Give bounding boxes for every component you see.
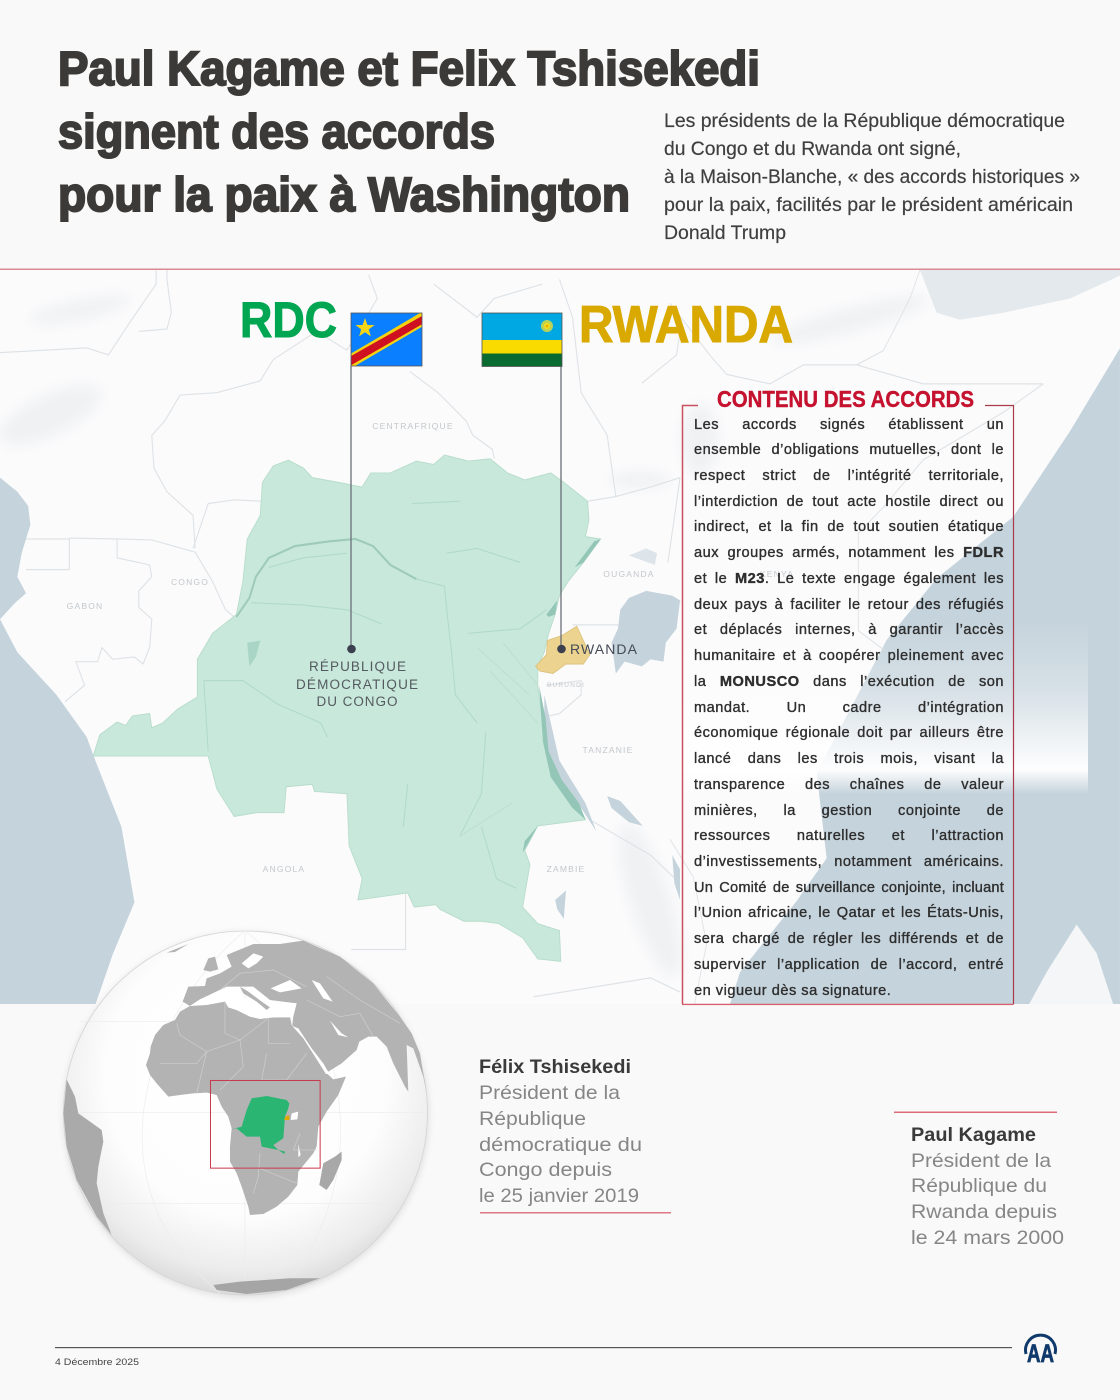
accords body text: et déplacés internes, à garantir l’accès xyxy=(694,622,1004,638)
locator rectangle xyxy=(210,1080,320,1168)
icon: AA logo: AA xyxy=(1027,1340,1054,1368)
accords body text: Les accords signés établissent un xyxy=(694,416,1004,432)
accords body text: d’investissements, notamment américains. xyxy=(694,854,1004,870)
great lakes and inland water xyxy=(544,548,680,919)
accords body text: ressources naturelles et l’attraction xyxy=(694,828,1004,844)
Kagame bio: République du xyxy=(911,1175,1047,1197)
intro text: à la Maison-Blanche, « des accords historiques » xyxy=(664,166,1080,188)
accords body text: sera chargé de régler les différends et de xyxy=(694,931,1004,947)
accords body text: l’interdiction de tout acte hostile direct ou xyxy=(694,494,1004,510)
Eurasia xyxy=(183,941,427,1093)
accords body text: indirect, et la fin de tout soutien étatique xyxy=(694,519,1004,535)
accords body text: deux pays à faciliter le retour des réfugiés xyxy=(694,597,1004,613)
Great Britain xyxy=(203,957,218,972)
intro text: Les présidents de la République démocratique xyxy=(664,110,1065,132)
DRC flag and pole xyxy=(347,313,422,653)
accords body text: aux groupes armés, notamment les FDLR xyxy=(694,545,1004,561)
accords box heading: CONTENU DES ACCORDS xyxy=(717,386,974,412)
neighbouring country labels: OUGANDA xyxy=(603,569,655,579)
accords body text: économique régionale doit par ailleurs être xyxy=(694,725,1004,741)
Rwanda map label: RWANDA xyxy=(570,641,638,657)
Kagame bio: le 24 mars 2000 xyxy=(911,1227,1064,1249)
Tshisekedi bio: Félix Tshisekedi xyxy=(479,1057,631,1078)
Tshisekedi bio: le 25 janvier 2019 xyxy=(479,1185,639,1207)
neighbouring country labels xyxy=(67,421,794,874)
gradient artifact over ocean xyxy=(816,654,1088,790)
accords body text: lancé dans les trois mois, visant la xyxy=(694,751,1004,767)
accords body text: humanitaire et à coopérer pleinement avec xyxy=(694,648,1004,664)
header panel xyxy=(0,0,1120,269)
Mediterranean, Black Sea, Caspian xyxy=(190,953,348,1157)
Rwanda flag and pole xyxy=(482,313,566,653)
intro text xyxy=(664,110,1080,244)
intro text: pour la paix, facilités par le président américain xyxy=(664,194,1073,216)
intro text: Donald Trump xyxy=(664,222,786,244)
map panel xyxy=(0,270,1120,1015)
Italy xyxy=(240,987,270,1010)
locator globe xyxy=(63,931,428,1297)
accords body text: superviser l’application de l’accord, entré xyxy=(694,957,1004,973)
neighbouring country labels: TANZANIE xyxy=(582,745,634,755)
lakes and rivers in DRC xyxy=(247,539,601,853)
Rwanda heading: RWANDA xyxy=(579,296,793,354)
accords body text: et le M23. Le texte engage également les xyxy=(694,571,1004,587)
accords body text: ensemble d’obligations mutuelles, dont le xyxy=(694,442,1004,458)
title: signent des accords xyxy=(58,106,495,159)
neighbouring country labels: CONGO xyxy=(171,577,209,587)
DRC territory xyxy=(93,455,601,961)
Antarctica xyxy=(213,1278,320,1294)
bottom band right xyxy=(680,1005,1120,1400)
accords body text: la MONUSCO dans l’exécution de son xyxy=(694,674,1004,690)
Rwanda on globe xyxy=(284,1115,289,1120)
Kagame bio: Président de la xyxy=(911,1150,1051,1172)
neighbouring country labels: CENTRAFRIQUE xyxy=(372,421,454,431)
neighbouring country labels: GABON xyxy=(67,601,103,611)
west ocean and gulf of guinea xyxy=(0,478,134,1011)
icon: AA logo xyxy=(1026,1335,1056,1368)
footer rule xyxy=(55,1347,1012,1348)
South America xyxy=(63,1079,112,1235)
title xyxy=(58,43,760,222)
Kagame bio: Rwanda depuis xyxy=(911,1201,1057,1223)
accords body text: minières, la gestion conjointe de xyxy=(694,803,1004,819)
accords body text: respect strict de l’intégrité territoriale, xyxy=(694,468,1004,484)
indian ocean and gulf of aden xyxy=(727,270,1120,1015)
neighbouring country labels: ZAMBIE xyxy=(547,864,585,874)
accords body text: Un Comité de surveillance conjointe, incluant xyxy=(694,880,1004,896)
neighbouring country labels: ANGOLA xyxy=(263,864,305,874)
terrain shading xyxy=(0,288,930,982)
intro text: du Congo et du Rwanda ont signé, xyxy=(664,138,961,160)
Tshisekedi bio: Congo depuis xyxy=(479,1159,612,1181)
Rwanda territory xyxy=(536,626,590,673)
DRC map label xyxy=(296,659,418,709)
Africa xyxy=(146,1002,346,1215)
globe landmasses xyxy=(63,931,427,1294)
header divider xyxy=(0,268,1120,270)
bottom band xyxy=(0,1004,680,1400)
Tshisekedi bio: démocratique du xyxy=(479,1134,642,1156)
title: Paul Kagame et Felix Tshisekedi xyxy=(58,43,760,96)
accords box frame xyxy=(682,406,1014,1004)
neighbouring country labels: KENYA xyxy=(760,569,794,579)
neighbouring country labels: BURUNDI xyxy=(547,682,585,689)
Tshisekedi bio xyxy=(479,1057,671,1214)
globe borders xyxy=(160,970,400,1193)
title: pour la paix à Washington xyxy=(58,169,630,222)
Madagascar xyxy=(319,1152,342,1190)
DRC map label: RÉPUBLIQUE xyxy=(309,659,406,674)
accords body text: mandat. Un cadre d’intégration xyxy=(694,700,1004,716)
accords body text: en vigueur dès sa signature. xyxy=(694,983,891,999)
Kagame bio: Paul Kagame xyxy=(911,1125,1036,1146)
Kagame bio xyxy=(894,1112,1064,1249)
date: 4 Décembre 2025 xyxy=(55,1357,139,1368)
DRC map label: DÉMOCRATIQUE xyxy=(296,677,418,692)
DRC map label: DU CONGO xyxy=(316,694,398,709)
DRC on globe xyxy=(232,1096,289,1154)
country borders xyxy=(0,270,680,997)
accords body text xyxy=(694,416,1004,999)
Greenland fragment xyxy=(167,944,188,953)
Tshisekedi bio: République xyxy=(479,1108,586,1130)
accords body text: transparence des chaînes de valeur xyxy=(694,777,1004,793)
madagascar xyxy=(1029,924,1113,1004)
accords body text: l’Union africaine, le Qatar et les États-Unis, xyxy=(694,905,1004,921)
DRC heading: RDC xyxy=(240,292,337,348)
Tshisekedi bio: Président de la xyxy=(479,1082,620,1104)
